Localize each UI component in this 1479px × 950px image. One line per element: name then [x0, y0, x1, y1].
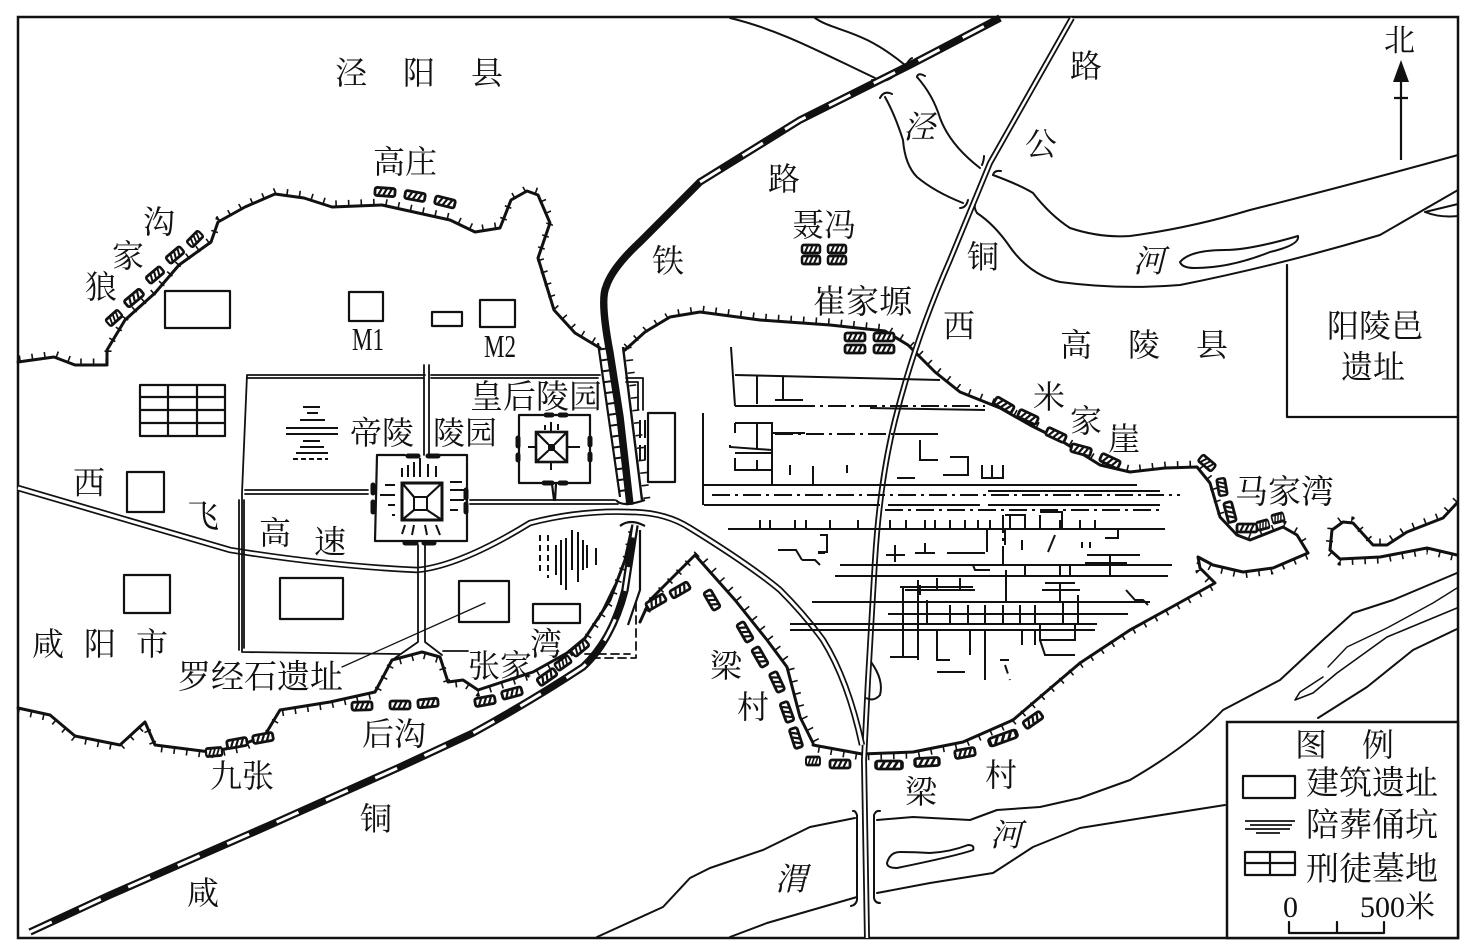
label: Liang village south — [905, 757, 1017, 810]
legend: attendant pits — [1245, 807, 1438, 844]
label: Liang village south: 梁 — [905, 774, 939, 810]
label: Liang village west — [710, 648, 769, 725]
label: Xitong highway: 路 — [1070, 48, 1102, 84]
label: Xitong highway: 公 — [1025, 126, 1057, 162]
label: Xitong highway — [943, 48, 1102, 344]
legend: building sites — [1243, 765, 1438, 802]
Jing river — [730, 18, 1458, 287]
scale bar: 500米 — [1360, 891, 1435, 924]
label: Xitong highway: 铜 — [967, 239, 999, 275]
label: Wei river — [775, 817, 1027, 897]
loess cliff edges — [18, 188, 1457, 757]
label: Mijia cliff: 崖 — [1108, 421, 1140, 457]
label: Xianyang city: 咸阳市 — [32, 626, 188, 662]
label: Emperor's mausoleum park: 帝陵 — [350, 415, 414, 451]
legend — [1227, 722, 1458, 938]
label: Xitong highway: 西 — [943, 308, 975, 344]
label: Xifei expressway — [73, 465, 346, 560]
label: Jingyang county: 泾阳县 — [335, 55, 539, 91]
label: Jing river: 泾 — [903, 109, 939, 145]
label: Zhangjia bay: 湾 — [530, 626, 562, 662]
label: Mijia cliff — [1033, 379, 1140, 457]
line to Luojingshi site — [342, 603, 485, 667]
scale bar — [1283, 891, 1435, 933]
label: Yangling city site: 阳陵邑 — [1327, 308, 1423, 344]
label: Jiuzhang: 九张 — [210, 758, 274, 794]
Wei river — [597, 573, 1457, 937]
Empress's mausoleum — [518, 415, 590, 500]
attendant burial pits — [286, 407, 645, 590]
legend: attendant pits: 陪葬俑坑 — [1306, 807, 1438, 844]
label: Liang village south: 村 — [985, 757, 1017, 793]
label: Emperor's mausoleum park — [350, 415, 497, 451]
label: Niefeng: 聂冯 — [792, 207, 856, 243]
label: M1: M1 — [352, 322, 384, 358]
label: Langjia gully: 沟 — [143, 204, 175, 240]
label: Luojingshi site: 罗经石遗址 — [178, 659, 343, 696]
legend: prisoner graves — [1245, 851, 1438, 888]
label: Xian-Tong railway south — [187, 801, 392, 911]
label: railway north: 铁 — [652, 243, 684, 279]
scale bar: 0 — [1283, 891, 1298, 924]
label: Langjia gully: 家 — [112, 238, 144, 274]
legend: building sites: 建筑遗址 — [1306, 765, 1438, 802]
label: Langjia gully: 狼 — [85, 269, 117, 305]
label: Liang village west: 梁 — [710, 648, 744, 684]
label: Emperor's mausoleum park: 陵园 — [433, 415, 497, 451]
north arrow: 北 — [1384, 23, 1415, 58]
Yangling city road grid — [703, 347, 1180, 680]
airport expressway — [18, 488, 862, 745]
railway — [30, 18, 1000, 932]
label: Zhangjia bay — [468, 626, 562, 684]
building sites — [124, 291, 675, 623]
label: Yangling city site — [1327, 308, 1423, 385]
label: Majia bay: 马家湾 — [1235, 474, 1334, 511]
label: Xifei expressway: 飞 — [187, 498, 219, 534]
legend: prisoner graves: 刑徒墓地 — [1306, 851, 1438, 888]
label: railway north — [652, 161, 800, 279]
label: Mijia cliff: 米 — [1033, 379, 1065, 415]
label: railway north: 路 — [768, 161, 800, 197]
label: Xian-Tong railway south: 咸 — [187, 875, 219, 911]
Emperor's mausoleum — [373, 455, 468, 543]
Xi-Tong highway — [864, 18, 1072, 938]
label: Xifei expressway: 速 — [314, 524, 346, 560]
mausoleum enclosure walls — [239, 365, 643, 658]
label: Gaozhuang: 高庄 — [373, 144, 437, 180]
label: Cuijia plateau: 崔家塬 — [813, 284, 913, 321]
label: Gaoling county: 高陵县 — [1060, 327, 1264, 363]
label: Yangling city site: 遗址 — [1341, 349, 1405, 385]
legend title: 图例 — [1295, 727, 1429, 763]
north arrow — [1384, 23, 1415, 160]
label: Empress's mausoleum park: 皇后陵园 — [470, 379, 602, 416]
label: Jing river: 河 — [1133, 243, 1170, 279]
label: Wei river: 河 — [990, 817, 1027, 853]
label: Wei river: 渭 — [775, 861, 812, 897]
label: Mijia cliff: 家 — [1070, 403, 1102, 439]
label: Hougou: 后沟 — [362, 716, 426, 752]
label: Liang village west: 村 — [737, 689, 769, 725]
label: Xifei expressway: 高 — [259, 515, 291, 551]
prisoner graves — [105, 187, 1285, 769]
Yangling county site outline — [1287, 265, 1458, 417]
prisoner cemetery grid — [140, 385, 225, 436]
label: Langjia gully — [85, 204, 175, 305]
label: Xian-Tong railway south: 铜 — [360, 801, 392, 837]
label: Zhangjia bay: 张家 — [468, 648, 532, 684]
label: Xifei expressway: 西 — [73, 465, 105, 501]
label: Jing river — [903, 109, 1170, 279]
label: M2: M2 — [484, 329, 516, 365]
